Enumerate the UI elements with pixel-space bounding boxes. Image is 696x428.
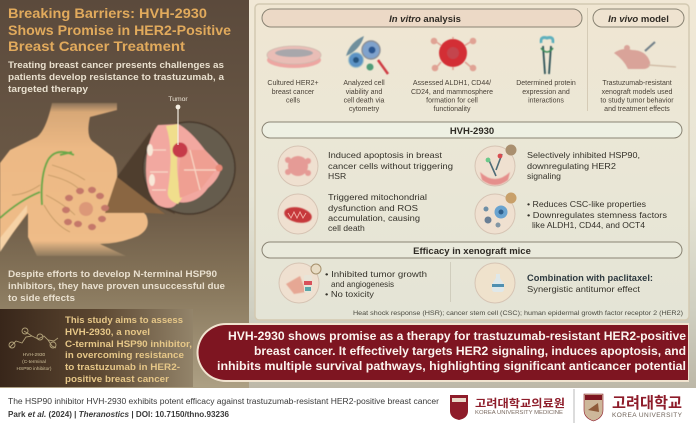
- logo: Korea University Medicine: [450, 395, 565, 420]
- caption: cytometry: Analyzed cell: [343, 80, 385, 87]
- icon: mitochondrion circle: [278, 194, 318, 234]
- tumor label: Tumor: [168, 96, 188, 103]
- icon: petri dish: [267, 46, 321, 68]
- text: CSC: [527, 199, 667, 230]
- caption: cultured cells: cells: [286, 98, 300, 104]
- panel: study aim: [0, 309, 193, 387]
- citation: [8, 397, 439, 419]
- logo: Korea University: [584, 394, 683, 421]
- footer band: [0, 388, 696, 428]
- text: tumor growth: • Inhibited tumor growth: [325, 269, 427, 279]
- heading: in vitro: In vitro analysis: [389, 14, 461, 25]
- study text: to trastuzumab in HER2-: [65, 362, 180, 373]
- text: HSP90: signaling: [527, 171, 561, 181]
- caption: xenograft: and treatment effects: [604, 106, 670, 113]
- left panel background: [0, 0, 249, 388]
- icon: antibody: [541, 38, 553, 74]
- text: CSC: like ALDH1, CD44, and OCT4: [532, 220, 645, 230]
- caption: ALDH1: CD24, and mammosphere: [411, 89, 493, 96]
- intro text: targeted therapy: [8, 84, 89, 95]
- magnifier circle: [143, 122, 235, 214]
- text: apoptosis: [328, 150, 453, 181]
- caption: xenograft: Trastuzumab-resistant: [602, 80, 672, 87]
- panel: methods and results: [255, 4, 689, 320]
- caption: protein: [516, 80, 576, 104]
- text: paclitaxel: Synergistic antitumor effect: [527, 284, 641, 294]
- text: tumor growth: [325, 269, 427, 299]
- mammary glands: [62, 187, 109, 230]
- tumor label: [168, 96, 188, 145]
- study text: in overcoming resistance: [65, 350, 184, 361]
- icon: paclitaxel circle: [475, 263, 515, 303]
- heading: HVH-2930: HVH-2930: [450, 126, 494, 137]
- callout: conclusion banner: [196, 323, 689, 382]
- text: apoptosis: cancer cells without triggering: [328, 161, 453, 171]
- text: mitochondria: accumulation, causing: [328, 213, 420, 223]
- heading: in vivo: In vivo model: [608, 14, 669, 25]
- text: mitochondria: cell death: [328, 223, 365, 233]
- title: [8, 6, 232, 54]
- molecule caption: HVH-2930: [23, 352, 46, 358]
- citation: The HSP90 inhibitor HVH-2930 exhibits potent efficacy against trastuzumab-resistant HER2-positive breast cancer: [8, 397, 439, 406]
- text: N-terminal inhibitors: [8, 269, 225, 304]
- study text: [65, 315, 192, 385]
- caption: ALDH1: [411, 80, 493, 113]
- caption: cytometry: [343, 80, 385, 113]
- callout: conclusion banner: inhibits multiple survival pathways, highlighting significant anticancer potential: [217, 359, 686, 373]
- right area background: [249, 0, 696, 388]
- caption: xenograft: [600, 80, 674, 113]
- heading: efficacy: [262, 242, 682, 258]
- intro text: Treating breast cancer presents challenges as: [8, 60, 224, 71]
- text: apoptosis: Induced apoptosis in breast: [328, 150, 443, 160]
- callout: conclusion banner: HVH-2930 shows promise as a therapy for trastuzumab-resistant HER2-positive: [228, 329, 686, 343]
- heading: in vitro: [262, 9, 582, 27]
- caption: cytometry: viability and: [346, 89, 382, 96]
- magnified breast: [146, 124, 221, 208]
- text: HSP90: [527, 150, 640, 181]
- study text: HVH-2930, a novel: [65, 327, 150, 338]
- molecule caption: HSP90 inhibitor): [17, 366, 52, 372]
- text: HSP90: downregulating HER2: [527, 161, 616, 171]
- heading: in vivo: [593, 9, 684, 27]
- icon: mouse: [614, 42, 676, 69]
- caption: protein: expression and: [522, 89, 570, 96]
- molecule caption: (C-terminal: [22, 359, 46, 365]
- icon: cytometry magnifier: [346, 36, 388, 74]
- text: CSC: • Reduces CSC-like properties: [527, 199, 646, 209]
- lymph vessels: [0, 152, 74, 218]
- text: tumor growth: and angiogenesis: [331, 279, 394, 289]
- study text: C-terminal HSP90 inhibitor,: [65, 339, 192, 350]
- callout: conclusion banner: breast cancer. It effectively targets HER2 signaling, induces apoptosis, and: [254, 344, 686, 358]
- molecule caption: [17, 352, 52, 372]
- footnote: Heat shock response (HSR); cancer stem cell (CSC); human epidermal growth factor receptor 2 (HER2): [353, 310, 683, 317]
- caption: xenograft: xenograft models used: [602, 89, 673, 96]
- tumor: [172, 142, 188, 158]
- icon: molecule: [9, 328, 58, 348]
- icon: stem cell circle: [475, 192, 516, 234]
- logo: Korea University: KOREA UNIVERSITY: [612, 412, 683, 419]
- icon: tumor growth circle: [279, 263, 321, 303]
- icon: HSP90 circle: [475, 144, 516, 186]
- caption: xenograft: to study tumor behavior: [600, 98, 674, 104]
- title: Shows Promise in HER2-Positive: [8, 23, 232, 38]
- text: paclitaxel: [527, 273, 653, 294]
- caption: ALDH1: Assessed ALDH1, CD44/: [413, 80, 491, 87]
- citation: Park et al. (2024) | Theranostics | DOI: 10.7150/thno.93236: [8, 410, 230, 419]
- arm shading: [0, 205, 27, 252]
- logo: Korea University Medicine: 고려대학교의료원: [475, 396, 565, 410]
- caption: ALDH1: functionality: [434, 106, 471, 113]
- text: CSC: • Downregulates stemness factors: [527, 210, 667, 220]
- icon: apoptosis circle: [278, 146, 318, 186]
- illustration: breast anatomy: [0, 103, 235, 256]
- study text: positive breast cancer: [65, 374, 169, 385]
- magnified wedge: [117, 132, 175, 214]
- text: paclitaxel: Combination with paclitaxel:: [527, 273, 653, 283]
- heading: efficacy: Efficacy in xenograft mice: [413, 246, 531, 257]
- logo: Korea University: 고려대학교: [612, 394, 682, 412]
- text: mitochondria: Triggered mitochondrial: [328, 192, 427, 202]
- text: N-terminal inhibitors: inhibitors, they have proven unsuccessful due: [8, 281, 225, 292]
- text: mitochondria: [328, 192, 427, 233]
- title: Breaking Barriers: HVH-2930: [8, 6, 207, 21]
- intro text: [8, 60, 225, 95]
- caption: protein: interactions: [528, 98, 564, 104]
- icon: red cancer cell: [432, 37, 476, 70]
- intro text: patients develop resistance to trastuzumab, a: [8, 72, 225, 83]
- text: N-terminal inhibitors: Despite efforts to develop N-terminal HSP90: [8, 269, 217, 280]
- caption: cytometry: cell death via: [344, 98, 385, 104]
- torso: [0, 103, 148, 256]
- study text: This study aims to assess: [65, 315, 183, 326]
- text: HSP90: Selectively inhibited HSP90,: [527, 150, 640, 160]
- text: tumor growth: • No toxicity: [325, 289, 375, 299]
- title: Breast Cancer Treatment: [8, 39, 186, 54]
- text: N-terminal inhibitors: to side effects: [8, 293, 75, 304]
- caption: cultured cells: breast cancer: [272, 89, 315, 96]
- logo: Korea University Medicine: KOREA UNIVERSITY MEDICINE: [475, 410, 564, 416]
- caption: cytometry: cytometry: [349, 106, 380, 113]
- caption: cultured cells: Cultured HER2+: [267, 80, 319, 87]
- heading: HVH-2930: [262, 122, 682, 138]
- caption: cultured cells: [267, 80, 319, 104]
- text: mitochondria: dysfunction and ROS: [328, 203, 418, 213]
- caption: ALDH1: formation for cell: [426, 98, 478, 104]
- text: apoptosis: HSR: [328, 171, 346, 181]
- caption: protein: Determined protein: [516, 80, 576, 87]
